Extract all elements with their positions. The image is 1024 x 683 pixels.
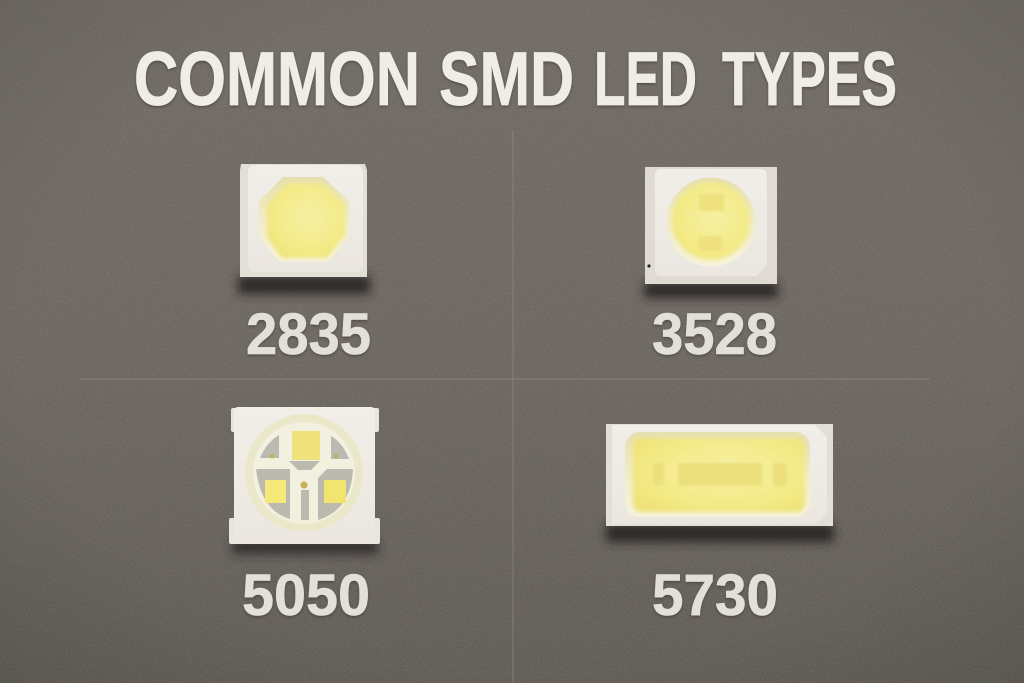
emitter window	[666, 178, 756, 266]
component: 2835 LED	[238, 164, 370, 294]
emitter window	[625, 432, 810, 517]
shadow	[232, 540, 378, 554]
polarity dot	[647, 264, 651, 268]
shadow	[606, 524, 834, 542]
label: 3528: 3528	[652, 302, 777, 367]
title: LED	[594, 37, 697, 122]
title: SMD	[439, 37, 574, 122]
title: COMMON	[134, 37, 420, 122]
label: 5050: 5050	[242, 563, 370, 628]
phosphor	[672, 182, 750, 260]
component: 3528 LED	[644, 167, 778, 298]
component: 5050 LED	[229, 407, 380, 554]
die marks	[699, 194, 724, 251]
title: TYPES	[722, 37, 897, 122]
die marks	[653, 463, 787, 486]
label: 5730: 5730	[652, 563, 778, 628]
reflector inner	[253, 422, 355, 524]
package base	[606, 424, 833, 526]
label: 2835: 2835	[246, 302, 371, 367]
die top	[292, 431, 320, 460]
emitter window	[259, 177, 349, 261]
bond wires	[270, 454, 338, 489]
shadow	[238, 276, 370, 294]
package body	[234, 407, 375, 544]
die left	[265, 480, 286, 503]
reflector cup	[245, 414, 363, 532]
package top	[612, 425, 827, 524]
shadow	[644, 282, 778, 298]
package base	[240, 164, 367, 277]
phosphor	[633, 438, 805, 512]
component: 5730 LED	[606, 424, 834, 542]
corner tabs	[229, 408, 380, 544]
package base	[645, 167, 777, 284]
package top	[248, 165, 363, 272]
phosphor	[267, 183, 345, 258]
title	[134, 37, 897, 122]
package top	[655, 169, 767, 276]
substrate pads	[256, 435, 353, 520]
die right	[324, 480, 346, 503]
